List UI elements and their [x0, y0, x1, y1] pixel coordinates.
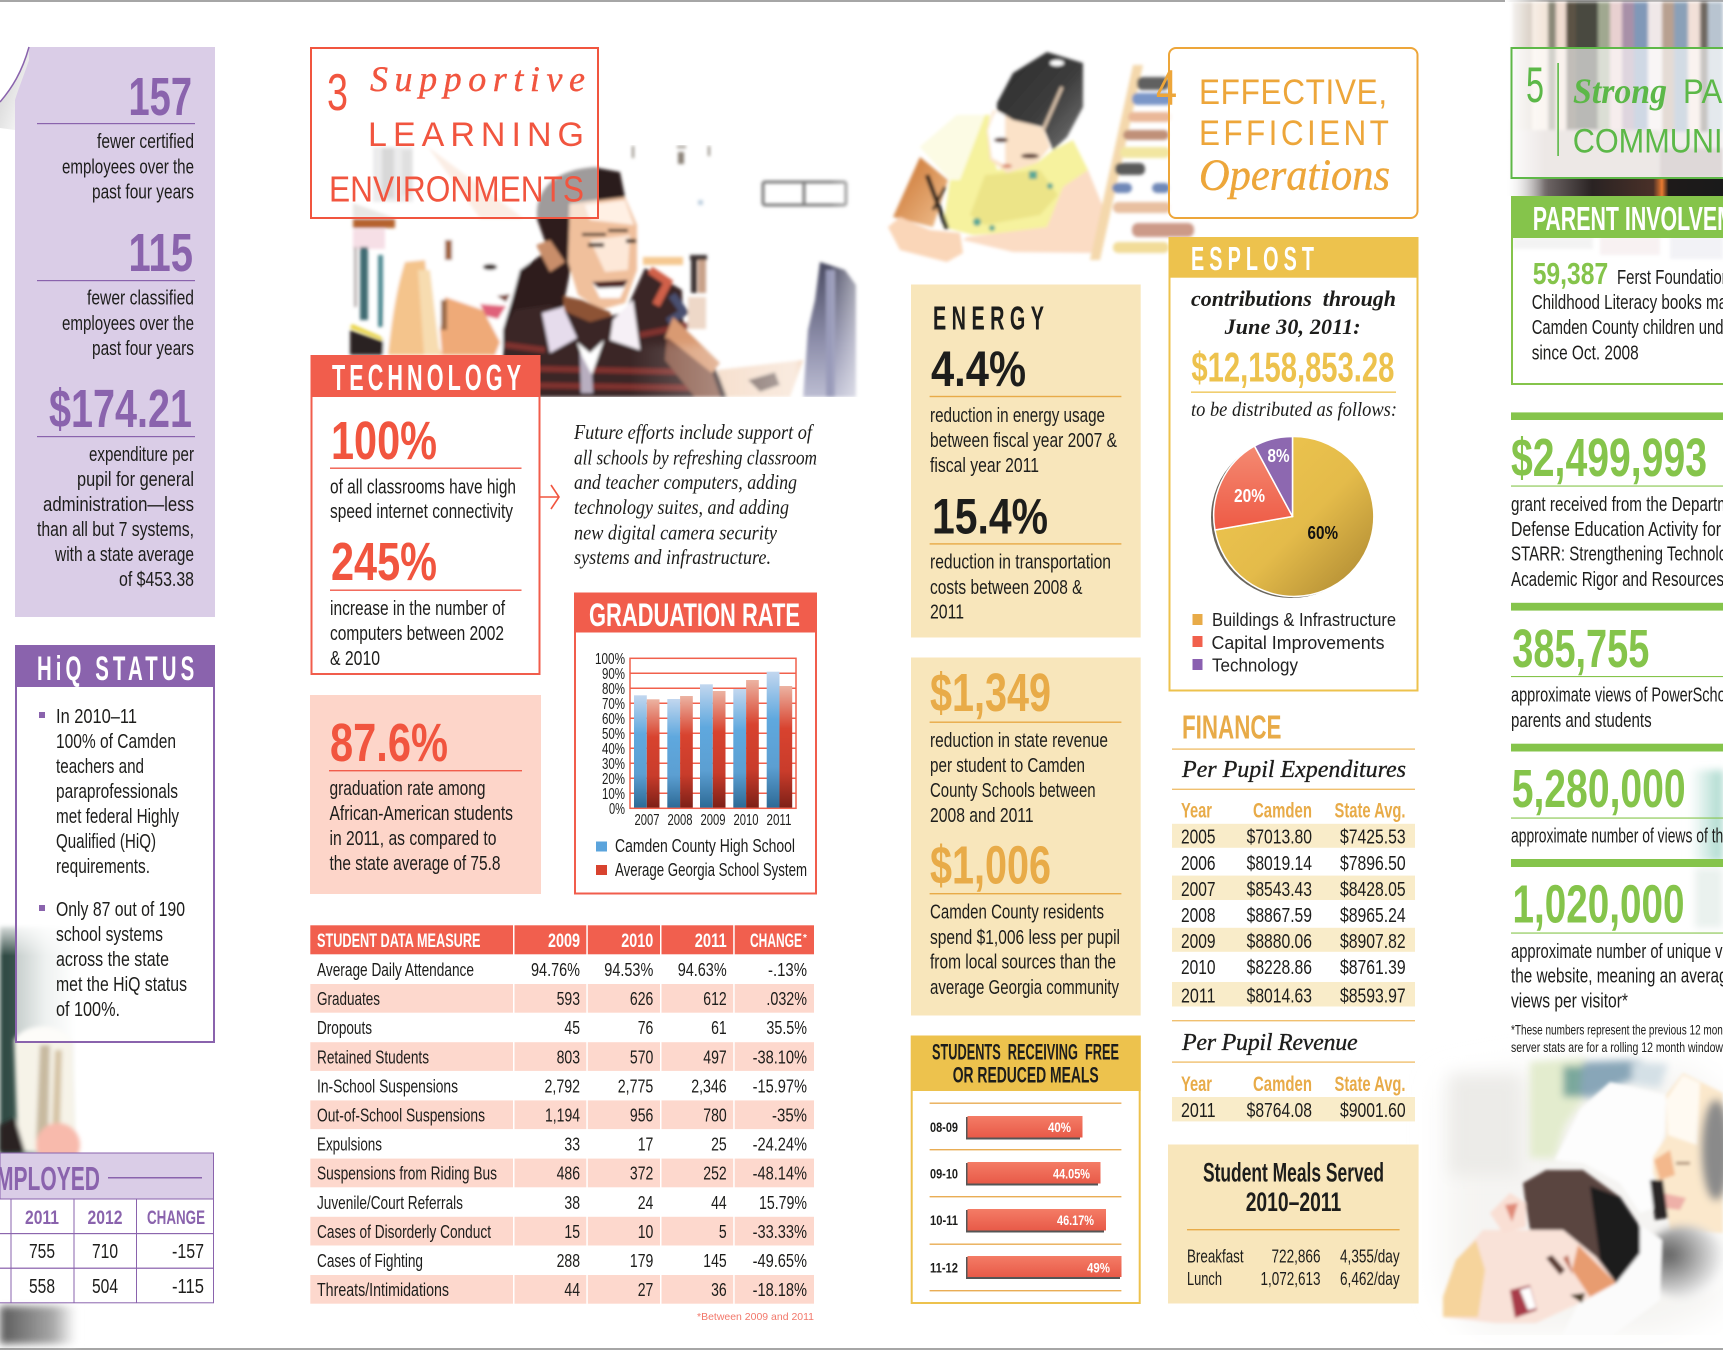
table rows: 25: [711, 1134, 727, 1155]
stat: 245 percent: & 2010: [330, 647, 380, 670]
stat: 245 percent: 245%: [331, 532, 437, 592]
expenditure column headers: [1181, 800, 1406, 822]
panel: revenue statistics: [911, 658, 1141, 1016]
bar chart: graduation rate 2007-2011: 60%: [602, 711, 625, 728]
stat: $174.21 expenditure per pupil: of $453.38: [119, 568, 194, 591]
bullet: 100 percent qualified: 100% of Camden: [56, 730, 176, 753]
photo: bookshelf behind the community heading: [1505, 0, 1723, 259]
text block: future efforts: [573, 420, 817, 569]
stat: 100 percent: [330, 411, 522, 523]
stat: $1,349: [930, 663, 1121, 827]
table rows: 2,346: [691, 1075, 727, 1096]
bar chart: graduation rate 2007-2011: 10%: [602, 786, 625, 803]
panel: graduation rate callout 87.6%: 87.6%: [330, 713, 448, 773]
pie legend: Buildings & Infrastructure: [1212, 610, 1396, 630]
bar: 09-10: 09-10: [930, 1167, 958, 1182]
stat: $174.21 expenditure per pupil: than all but 7 systems,: [37, 518, 194, 541]
expenditure column headers: State Avg.: [1334, 800, 1406, 822]
table header: 2011: [695, 931, 727, 952]
table rows: 94.63%: [678, 959, 727, 980]
stat: 115 fewer classified: past four years: [92, 337, 194, 360]
heading: graduation rate: GRADUATION RATE: [589, 597, 800, 633]
pie chart: distribution: 8%: [1268, 446, 1290, 466]
panel: technology: [311, 355, 540, 674]
table rows: 486: [557, 1163, 580, 1184]
revenue row: 2011: [1181, 1100, 1216, 1122]
footnote: server stats: [1511, 1023, 1723, 1055]
bar chart: graduation rate 2007-2011: 2007: [634, 812, 660, 829]
bar chart: graduation rate 2007-2011: 2008: [668, 812, 692, 829]
table: employed staff: 755: [29, 1241, 55, 1263]
stat: 4.4 percent: 4.4%: [931, 341, 1026, 397]
panel: graduation rate callout 87.6%: the state average of 75.8: [330, 852, 500, 875]
expenditure rows: $8907.82: [1340, 931, 1406, 953]
bar chart: graduation rate 2007-2011: 2010: [734, 812, 759, 829]
pie legend: Capital Improvements: [1212, 633, 1384, 653]
stat: $1,349: County Schools between: [930, 779, 1096, 802]
stat: $1,006: from local sources than the: [930, 951, 1116, 974]
bar: 11-12: 49%: [1087, 1260, 1110, 1276]
table rows: -35%: [772, 1104, 807, 1126]
stat: 245 percent: computers between 2002: [330, 622, 504, 645]
table rows: Cases of Disorderly Conduct: [317, 1221, 491, 1242]
bar chart: graduation rate 2007-2011: 30%: [602, 756, 625, 773]
revenue row: $8764.08: [1247, 1100, 1312, 1122]
stat: 4.4 percent: reduction in energy usage: [930, 404, 1105, 427]
bullet: 100 percent qualified: met federal Highly: [56, 805, 180, 828]
table rows: -24.24%: [753, 1134, 807, 1155]
table rows: 10: [638, 1221, 653, 1242]
title box: 4 Effective, Efficient Operations: [1156, 48, 1418, 218]
stat: 157 fewer certified: [37, 67, 195, 204]
pie chart: distribution: [1211, 436, 1374, 598]
stat: 385,755 views: 385,755: [1512, 619, 1649, 679]
table rows: 24: [638, 1192, 653, 1213]
chart legend: Average Georgia School System: [615, 859, 807, 880]
text: contributions through June 30, 2011: contributions through: [1191, 286, 1396, 311]
expenditure rows: 2009: [1181, 931, 1216, 953]
revenue column headers: State Avg.: [1334, 1073, 1406, 1096]
title box: 5 Strong Parent Community: 5: [1526, 57, 1544, 113]
table: employed staff: 2012: [88, 1208, 122, 1229]
revenue row: [1181, 1100, 1406, 1122]
stat: 4.4 percent: fiscal year 2011: [930, 454, 1039, 477]
table header: [317, 931, 807, 952]
revenue row: $9001.60: [1340, 1100, 1406, 1122]
stat: 245 percent: [330, 532, 522, 670]
stat: 100 percent: speed internet connectivity: [330, 500, 514, 523]
text block: future efforts: Future efforts include support of: [573, 420, 815, 444]
stat: $1,349: per student to Camden: [930, 754, 1085, 777]
table rows: 956: [630, 1104, 653, 1126]
table rows: 27: [638, 1279, 653, 1300]
panel: graduation rate chart: [574, 592, 817, 894]
expenditure rows: $7013.80: [1247, 827, 1312, 849]
table: employed staff: 504: [92, 1276, 118, 1298]
heading: free or reduced meals: [932, 1040, 1119, 1088]
stat: $1,006: average Georgia community: [930, 976, 1120, 999]
expenditure rows: $8880.06: [1247, 931, 1312, 953]
bullet: 100 percent qualified: requirements.: [56, 855, 150, 878]
table rows: 179: [630, 1250, 653, 1271]
table rows: Juvenile/Court Referrals: [317, 1192, 463, 1213]
expenditure column headers: Year: [1181, 800, 1212, 822]
table rows: 372: [630, 1163, 653, 1184]
stat: 157 fewer certified: fewer certified: [97, 130, 194, 153]
bar chart: graduation rate 2007-2011: 50%: [602, 726, 625, 743]
table: employed staff: CHANGE: [147, 1208, 205, 1229]
photo: girl writing beside an abacus: [888, 52, 1194, 262]
table rows: -15.97%: [753, 1075, 807, 1096]
panel: graduation rate callout 87.6%: graduation rate among: [330, 777, 486, 800]
arrow: technology to future efforts: [540, 485, 559, 509]
photo: parent and laughing child: [1440, 1054, 1723, 1330]
stat: $1,006: [930, 836, 1121, 999]
panel: HiQ status: [15, 645, 215, 1042]
heading: finance: FINANCE: [1182, 708, 1282, 745]
bullet: 87 out of 190 systems: across the state: [56, 948, 169, 971]
pie legend: [1192, 610, 1396, 675]
table rows: 612: [703, 988, 727, 1009]
table rows: .032%: [766, 988, 807, 1009]
stat: $174.21 expenditure per pupil: pupil for general: [77, 468, 194, 491]
photo: student at left edge: [0, 920, 80, 1344]
expenditure rows: 2010: [1181, 957, 1216, 979]
table rows: [317, 959, 807, 1300]
bar chart: graduation rate 2007-2011: 40%: [602, 741, 625, 758]
stat: 115 fewer classified: [37, 223, 195, 360]
table rows: 35.5%: [766, 1017, 807, 1038]
title box: 4 Effective, Efficient Operations: 4: [1156, 60, 1177, 116]
table rows: -38.10%: [753, 1046, 807, 1067]
table: employed staff: 710: [92, 1241, 118, 1263]
table rows: Retained Students: [317, 1046, 429, 1067]
table rows: 497: [703, 1046, 727, 1067]
chart legend: Camden County High School: [615, 835, 795, 856]
bullet: 100 percent qualified: paraprofessionals: [56, 780, 178, 803]
table rows: -.13%: [768, 959, 807, 980]
bar: 10-11: [930, 1209, 1106, 1232]
bullet: 87 out of 190 systems: [39, 898, 187, 1021]
stat: 115 fewer classified: 115: [128, 223, 193, 283]
stat: 100 percent: 100%: [331, 411, 437, 471]
stat: ESPLOST total: $12,158,853.28: [1191, 344, 1394, 391]
bar: 09-10: 44.05%: [1053, 1166, 1090, 1182]
stat: $174.21 expenditure per pupil: with a state average: [54, 543, 194, 566]
bar chart: graduation rate 2007-2011: 20%: [602, 771, 625, 788]
table rows: 44: [711, 1192, 727, 1213]
stat: 115 fewer classified: fewer classified: [87, 286, 194, 309]
bullet: 87 out of 190 systems: school systems: [56, 923, 163, 946]
table rows: 15: [564, 1221, 580, 1242]
expenditure rows: $7896.50: [1340, 853, 1406, 875]
text block: future efforts: technology suites, and adding: [574, 495, 789, 519]
title box: 3 Supportive Learning Environments: LEARNING: [368, 116, 584, 154]
table header: STUDENT DATA MEASURE: [317, 931, 480, 952]
stat: $174.21 expenditure per pupil: [37, 379, 195, 591]
bullet: 100 percent qualified: teachers and: [56, 755, 144, 778]
stat: 100 percent: of all classrooms have high: [330, 476, 516, 498]
stat: 59,387: since Oct. 2008: [1532, 342, 1639, 364]
expenditure rows: $8428.05: [1340, 879, 1406, 901]
stat: 385,755 views: [1511, 619, 1723, 732]
bar: 08-09: [930, 1116, 1082, 1140]
table rows: 15.79%: [759, 1192, 807, 1213]
expenditure rows: $7425.53: [1340, 827, 1406, 849]
panel: parent involvement: [1511, 196, 1723, 384]
photo: laptop edge at right: [1690, 770, 1723, 928]
expenditure rows: $8761.39: [1340, 957, 1406, 979]
pie legend: Technology: [1212, 655, 1298, 675]
table: employed staff: 558: [29, 1276, 55, 1298]
title box: 3 Supportive Learning Environments: Supportive: [370, 59, 585, 99]
expenditure rows: $8593.97: [1340, 986, 1406, 1008]
stat: $174.21 expenditure per pupil: administration—less: [43, 493, 194, 516]
table rows: 145: [703, 1250, 727, 1271]
text: contributions through June 30, 2011: June 30, 2011:: [1224, 314, 1361, 339]
stat: 15.4 percent: reduction in transportation: [930, 551, 1111, 574]
table rows: Expulsions: [317, 1134, 382, 1155]
panel: graduation rate callout 87.6%: African-American students: [330, 802, 513, 825]
table footnote: *Between 2009 and 2011: [697, 1311, 814, 1323]
table rows: 252: [703, 1163, 727, 1184]
bar chart: graduation rate 2007-2011: 80%: [602, 681, 625, 698]
stat: 59,387: [1532, 256, 1723, 364]
text block: future efforts: systems and infrastructure.: [574, 545, 771, 569]
stat: 115 fewer classified: employees over the: [62, 312, 194, 335]
stat: 1,020,000 unique visitors: [1511, 874, 1723, 1012]
bullet: 87 out of 190 systems: Only 87 out of 190: [56, 898, 185, 921]
table: employed staff: 2011: [25, 1208, 59, 1229]
bar chart: graduation rate 2007-2011: 0%: [609, 801, 625, 818]
bar: 11-12: [930, 1256, 1122, 1279]
text block: future efforts: and teacher computers, adding: [574, 470, 797, 494]
panel: lilac staffing statistics: [0, 47, 215, 617]
expenditure rows: [1181, 827, 1406, 1008]
expenditure rows: 2011: [1181, 986, 1216, 1008]
expenditure column headers: Camden: [1253, 800, 1312, 822]
bullet: 100 percent qualified: Qualified (HiQ): [56, 830, 156, 853]
expenditure rows: 2008: [1181, 905, 1216, 927]
panel: energy: [911, 284, 1141, 638]
table rows: 36: [711, 1279, 727, 1300]
table rows: 17: [638, 1134, 653, 1155]
heading: energy: ENERGY: [933, 299, 1044, 337]
table: employed staff: [0, 1153, 214, 1303]
subheading: per pupil revenue: Per Pupil Revenue: [1181, 1030, 1358, 1056]
table rows: 1,194: [545, 1104, 580, 1126]
expenditure rows: $8867.59: [1247, 905, 1312, 927]
panel: graduation rate callout 87.6%: [310, 695, 541, 894]
table header: 2010: [621, 931, 653, 952]
stat: 15.4 percent: costs between 2008 &: [930, 576, 1083, 599]
stat: $1,006: $1,006: [930, 836, 1051, 896]
panel: students receiving free or reduced meals: [911, 1036, 1141, 1303]
expenditure rows: 2005: [1181, 827, 1216, 849]
green dividers: [1511, 412, 1723, 867]
text block: future efforts: new digital camera security: [574, 520, 778, 544]
panel: student meals served: 722,866: [1272, 1245, 1320, 1266]
stat: 245 percent: increase in the number of: [330, 597, 505, 620]
table rows: 288: [557, 1250, 580, 1271]
stat: $1,349: 2008 and 2011: [930, 804, 1034, 827]
panel: ESPLOST: [1169, 238, 1418, 690]
table header: *: [803, 933, 807, 944]
table rows: Out-of-School Suspensions: [317, 1104, 485, 1126]
table rows: 94.53%: [604, 959, 653, 980]
table header: CHANGE: [750, 931, 802, 952]
table rows: 38: [564, 1192, 580, 1213]
table rows: Graduates: [317, 988, 380, 1009]
panel: student meals served: Student Meals Served: [1203, 1158, 1384, 1188]
expenditure rows: $8019.14: [1247, 853, 1312, 875]
heading: free or reduced meals: OR REDUCED MEALS: [953, 1062, 1099, 1088]
table rows: 803: [557, 1046, 580, 1067]
stat: 4.4 percent: between fiscal year 2007 &: [930, 429, 1117, 452]
panel: student meals served: 2010–2011: [1246, 1187, 1341, 1217]
table rows: Dropouts: [317, 1017, 372, 1038]
stat: $1,006: Camden County residents: [930, 900, 1104, 924]
expenditure rows: $8965.24: [1340, 905, 1406, 927]
table rows: 45: [564, 1017, 580, 1038]
table rows: Cases of Fighting: [317, 1250, 423, 1271]
stat: 1,020,000 unique visitors: views per visitor*: [1511, 989, 1628, 1012]
photo: two students laughing at a computer: [350, 145, 885, 405]
bar: 10-11: 46.17%: [1057, 1212, 1094, 1228]
title box: 3 Supportive Learning Environments: [311, 48, 598, 218]
title box: 4 Effective, Efficient Operations: EFFECTIVE,: [1199, 74, 1387, 112]
title box: 5 Strong Parent Community: [1512, 48, 1723, 178]
chart legend: [596, 835, 807, 880]
stat: 15.4 percent: [930, 488, 1121, 624]
bar chart: graduation rate 2007-2011: 90%: [602, 666, 625, 683]
panel: student meals served: [1168, 1144, 1419, 1304]
panel: graduation rate callout 87.6%: in 2011, as compared to: [330, 827, 496, 850]
bar: 09-10: [930, 1162, 1100, 1186]
pie chart: distribution: 20%: [1234, 486, 1265, 506]
title box: 3 Supportive Learning Environments: ENVIRONMENTS: [329, 168, 584, 210]
table rows: 94.76%: [531, 959, 580, 980]
panel: student meals served: 6,462/day: [1340, 1268, 1400, 1289]
expenditure rows: 2007: [1181, 879, 1216, 901]
title box: 4 Effective, Efficient Operations: EFFICIENT: [1199, 115, 1389, 153]
stat: $1,006: spend $1,006 less per pupil: [930, 926, 1120, 949]
heading: ESPLOST: ESPLOST: [1191, 240, 1314, 277]
table rows: 593: [557, 988, 580, 1009]
table rows: 5: [719, 1221, 727, 1242]
table rows: -18.18%: [753, 1279, 807, 1300]
stat: 157 fewer certified: past four years: [92, 181, 194, 204]
bullet: 100 percent qualified: In 2010–11: [56, 705, 137, 728]
table rows: -33.33%: [753, 1221, 807, 1242]
table rows: 2,775: [618, 1075, 653, 1096]
subheading: per pupil expenditures: Per Pupil Expenditures: [1181, 757, 1406, 783]
table header: 2009: [548, 931, 580, 952]
pie chart: distribution: 60%: [1308, 523, 1338, 543]
heading: free or reduced meals: STUDENTS RECEIVING FREE: [932, 1040, 1119, 1064]
table rows: 780: [703, 1104, 727, 1126]
table rows: -49.65%: [753, 1250, 807, 1271]
table rows: 2,792: [544, 1075, 580, 1096]
bar chart: graduation rate 2007-2011: [595, 651, 796, 829]
panel: student meals served: Lunch: [1187, 1268, 1222, 1289]
revenue column headers: Camden: [1253, 1073, 1312, 1096]
table rows: 44: [564, 1279, 580, 1300]
title box: 4 Effective, Efficient Operations: Operations: [1199, 151, 1390, 200]
bar chart: graduation rate 2007-2011: 2009: [700, 812, 726, 829]
table: employed staff: -115: [172, 1276, 204, 1298]
stat: 15.4 percent: 2011: [930, 601, 964, 624]
title box: 3 Supportive Learning Environments: 3: [327, 64, 348, 122]
stat: $1,349: $1,349: [930, 663, 1051, 723]
revenue column headers: Year: [1181, 1073, 1212, 1096]
table rows: Suspensions from Riding Bus: [317, 1163, 497, 1184]
panel: student meals served: 1,072,613: [1260, 1268, 1320, 1289]
table rows: Threats/Intimidations: [317, 1279, 449, 1300]
bar: 11-12: 11-12: [930, 1260, 958, 1276]
table rows: -48.14%: [753, 1163, 807, 1184]
bullet: 87 out of 190 systems: of 100%.: [56, 998, 120, 1021]
table rows: In-School Suspensions: [317, 1075, 458, 1096]
bullet: 100 percent qualified: [39, 705, 180, 878]
stat: 157 fewer certified: employees over the: [62, 156, 194, 178]
panel: student meals served: Breakfast: [1187, 1245, 1244, 1266]
stat: 4.4 percent: [930, 341, 1121, 477]
stat: 5,280,000 views: [1511, 759, 1723, 847]
stat: 157 fewer certified: 157: [128, 67, 192, 127]
expenditure rows: $8228.86: [1247, 957, 1312, 979]
stat: 385,755 views: parents and students: [1511, 709, 1652, 732]
text: to be distributed: to be distributed as follows:: [1191, 400, 1397, 421]
table: student data measures: [310, 925, 814, 1323]
heading: technology: TECHNOLOGY: [332, 358, 521, 398]
panel: finance: [1172, 708, 1415, 1122]
expenditure rows: $8543.43: [1247, 879, 1312, 901]
table rows: 626: [630, 988, 653, 1009]
revenue column headers: [1181, 1073, 1406, 1096]
bullet: 87 out of 190 systems: met the HiQ status: [56, 973, 187, 996]
expenditure rows: $8014.63: [1247, 986, 1312, 1008]
bar chart: graduation rate 2007-2011: 70%: [602, 696, 625, 713]
page curl: [0, 47, 29, 130]
bar chart: graduation rate 2007-2011: 2011: [766, 812, 792, 829]
bar: 10-11: 10-11: [930, 1213, 958, 1228]
expenditure rows: 2006: [1181, 853, 1216, 875]
stat: 15.4 percent: 15.4%: [932, 488, 1048, 544]
panel: student meals served: 4,355/day: [1340, 1245, 1400, 1266]
stat: $1,349: reduction in state revenue: [930, 729, 1108, 752]
table: employed staff: -157: [172, 1241, 204, 1263]
stat: $174.21 expenditure per pupil: expenditure per: [89, 443, 194, 466]
table rows: Average Daily Attendance: [317, 959, 474, 980]
table rows: 61: [711, 1017, 727, 1038]
text: contributions through June 30, 2011: [1191, 286, 1396, 339]
bar: 08-09: 40%: [1048, 1119, 1071, 1135]
stat: $174.21 expenditure per pupil: $174.21: [49, 379, 192, 439]
stat: $2,499,993 grant: [1511, 428, 1723, 591]
table rows: 570: [630, 1046, 653, 1067]
panel: online and grant statistics: [1511, 412, 1723, 1055]
table rows: 33: [564, 1134, 580, 1155]
stat: 59,387: 59,387: [1533, 256, 1608, 291]
table rows: 76: [638, 1017, 653, 1038]
text block: future efforts: all schools by refreshing classroom: [574, 445, 817, 469]
bar chart: graduation rate 2007-2011: 100%: [595, 651, 625, 668]
title box: 5 Strong Parent Community: Strong: [1573, 71, 1667, 111]
heading: HiQ status: HiQ STATUS: [37, 650, 194, 687]
bar: 08-09: 08-09: [930, 1120, 958, 1135]
